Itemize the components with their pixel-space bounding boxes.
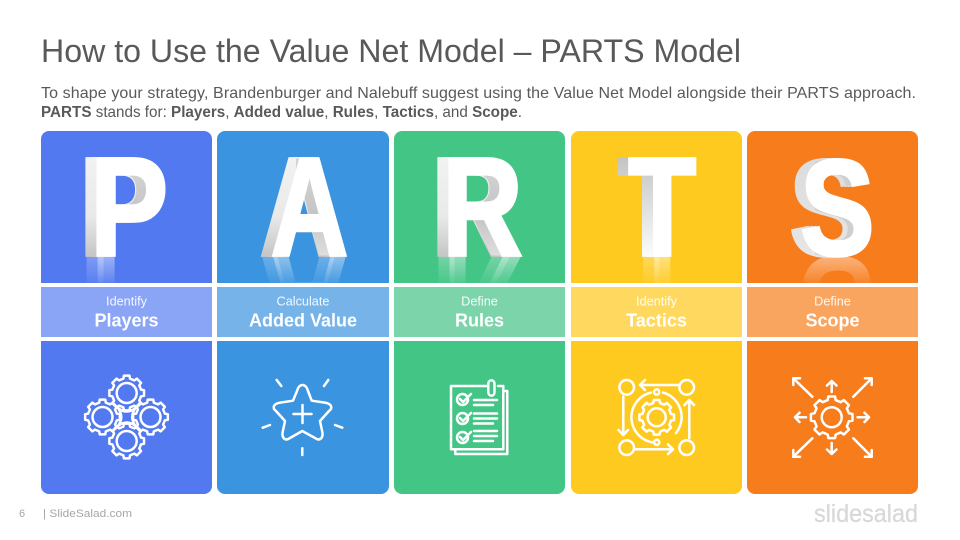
- letter R: R: [438, 128, 519, 285]
- label Tactics: [626, 294, 687, 330]
- label Players: Players: [94, 310, 159, 330]
- letter R: R: [442, 227, 523, 384]
- letter S: S: [800, 131, 875, 285]
- panel: Added Value: [217, 128, 389, 494]
- icon: gear with outward arrows: [793, 378, 872, 457]
- footer source: | SlideSalad.com: [43, 508, 132, 520]
- label Tactics: Identify: [636, 294, 678, 308]
- letter A: A: [260, 128, 338, 286]
- panel: Tactics: [571, 128, 742, 494]
- letter T: T: [624, 128, 693, 285]
- letter T: T: [617, 128, 685, 285]
- page number: 6: [19, 508, 25, 520]
- intro text: PARTS stands for: Players, Added value, Rules, Tactics, and Scope.: [41, 104, 522, 121]
- letter P: P: [86, 128, 165, 286]
- intro text: To shape your strategy, Brandenburger and Nalebuff suggest using the Value Net Model alongside their PARTS approach.: [41, 85, 916, 102]
- icon: four gears: [85, 376, 168, 458]
- label Added Value: Added Value: [249, 310, 357, 330]
- letter T: T: [628, 227, 696, 384]
- label Scope: Define: [814, 294, 851, 308]
- panel: Rules: [394, 128, 565, 494]
- letter S: S: [796, 131, 871, 285]
- icon: gear cycle: [618, 380, 694, 455]
- panel: Players: [41, 128, 212, 494]
- label Players: [94, 294, 159, 330]
- letter P: P: [83, 128, 161, 286]
- letter R: R: [431, 227, 512, 384]
- label Scope: Scope: [805, 310, 860, 330]
- title: How to Use the Value Net Model – PARTS Model: [41, 33, 741, 69]
- letter R: R: [435, 128, 516, 285]
- label Rules: Rules: [455, 310, 504, 330]
- label Added Value: Calculate: [277, 294, 329, 308]
- letter P: P: [79, 128, 157, 286]
- label Scope: [805, 294, 860, 330]
- letter T: T: [617, 227, 685, 384]
- letter T: T: [621, 128, 689, 285]
- icon: checklist: [451, 380, 507, 454]
- label Added Value: [249, 294, 357, 330]
- letter R: R: [435, 128, 516, 285]
- panel: Scope: [747, 131, 918, 494]
- icon: star with plus: [263, 380, 342, 455]
- letter P: P: [79, 128, 157, 286]
- letter A: A: [260, 227, 338, 385]
- letter R: R: [431, 128, 512, 285]
- label Players: Identify: [106, 294, 148, 308]
- letter R: R: [438, 128, 519, 285]
- letter A: A: [270, 227, 349, 385]
- letter P: P: [90, 227, 168, 385]
- letter P: P: [90, 128, 168, 286]
- letter T: T: [628, 128, 696, 285]
- letter A: A: [270, 128, 349, 286]
- letter R: R: [442, 128, 523, 285]
- intro text: [41, 85, 916, 121]
- letter S: S: [796, 131, 871, 285]
- label Rules: [455, 294, 504, 330]
- letter S: S: [793, 131, 868, 285]
- letter S: S: [800, 227, 875, 381]
- logo: slidesalad: [814, 500, 918, 528]
- letter A: A: [264, 128, 342, 286]
- letter P: P: [79, 227, 157, 385]
- letter A: A: [264, 128, 342, 286]
- label Tactics: Tactics: [626, 310, 687, 330]
- letter S: S: [789, 131, 864, 285]
- letter A: A: [260, 128, 338, 286]
- letter R: R: [431, 128, 512, 285]
- letter S: S: [793, 131, 868, 285]
- label Rules: Define: [461, 294, 498, 308]
- letter A: A: [267, 128, 345, 286]
- letter A: A: [267, 128, 345, 286]
